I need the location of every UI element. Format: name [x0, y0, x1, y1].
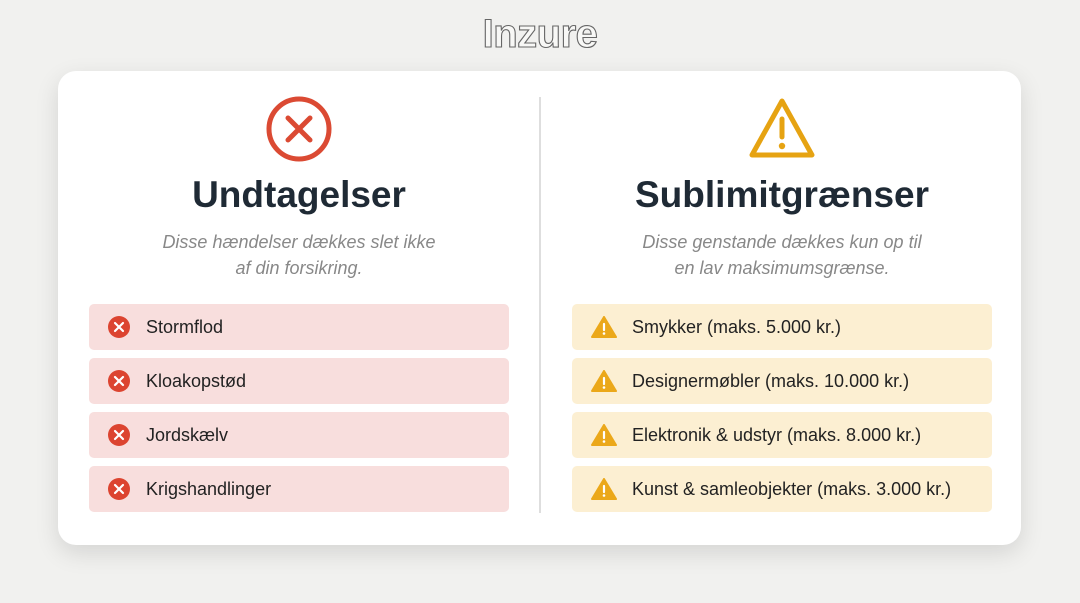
panel: undtagelser: [89, 96, 509, 512]
heading: Undtagelser: [192, 174, 406, 215]
row: [572, 412, 992, 458]
row: [572, 358, 992, 404]
row: Kunst & samleobjekter (maks. 3.000 kr.): [632, 479, 951, 499]
subtitle: af din forsikring.: [235, 258, 363, 278]
row: [89, 358, 509, 404]
row: Smykker (maks. 5.000 kr.): [632, 317, 841, 337]
row: Designermøbler (maks. 10.000 kr.): [632, 371, 909, 391]
heading: Sublimitgrænser: [635, 174, 929, 215]
subtitle: Disse genstande dækkes kun op til: [642, 232, 922, 252]
row: Kloakopstød: [146, 371, 246, 391]
row: [572, 304, 992, 350]
row: [572, 466, 992, 512]
row: Krigshandlinger: [146, 479, 271, 499]
subtitle: [642, 232, 922, 278]
row: Elektronik & udstyr (maks. 8.000 kr.): [632, 425, 921, 445]
subtitle: en lav maksimumsgrænse.: [674, 258, 890, 278]
row: Stormflod: [146, 317, 223, 337]
logo: Inzure: [483, 12, 597, 56]
card: [58, 71, 1021, 545]
row: Jordskælv: [146, 425, 228, 445]
row: [89, 304, 509, 350]
row: [89, 412, 509, 458]
row: [89, 466, 509, 512]
subtitle: Disse hændelser dækkes slet ikke: [162, 232, 436, 252]
icon: x circle: [266, 96, 332, 162]
icon: warning: [750, 98, 814, 158]
subtitle: [162, 232, 436, 278]
panel: sublimitgrænser: [572, 98, 992, 512]
